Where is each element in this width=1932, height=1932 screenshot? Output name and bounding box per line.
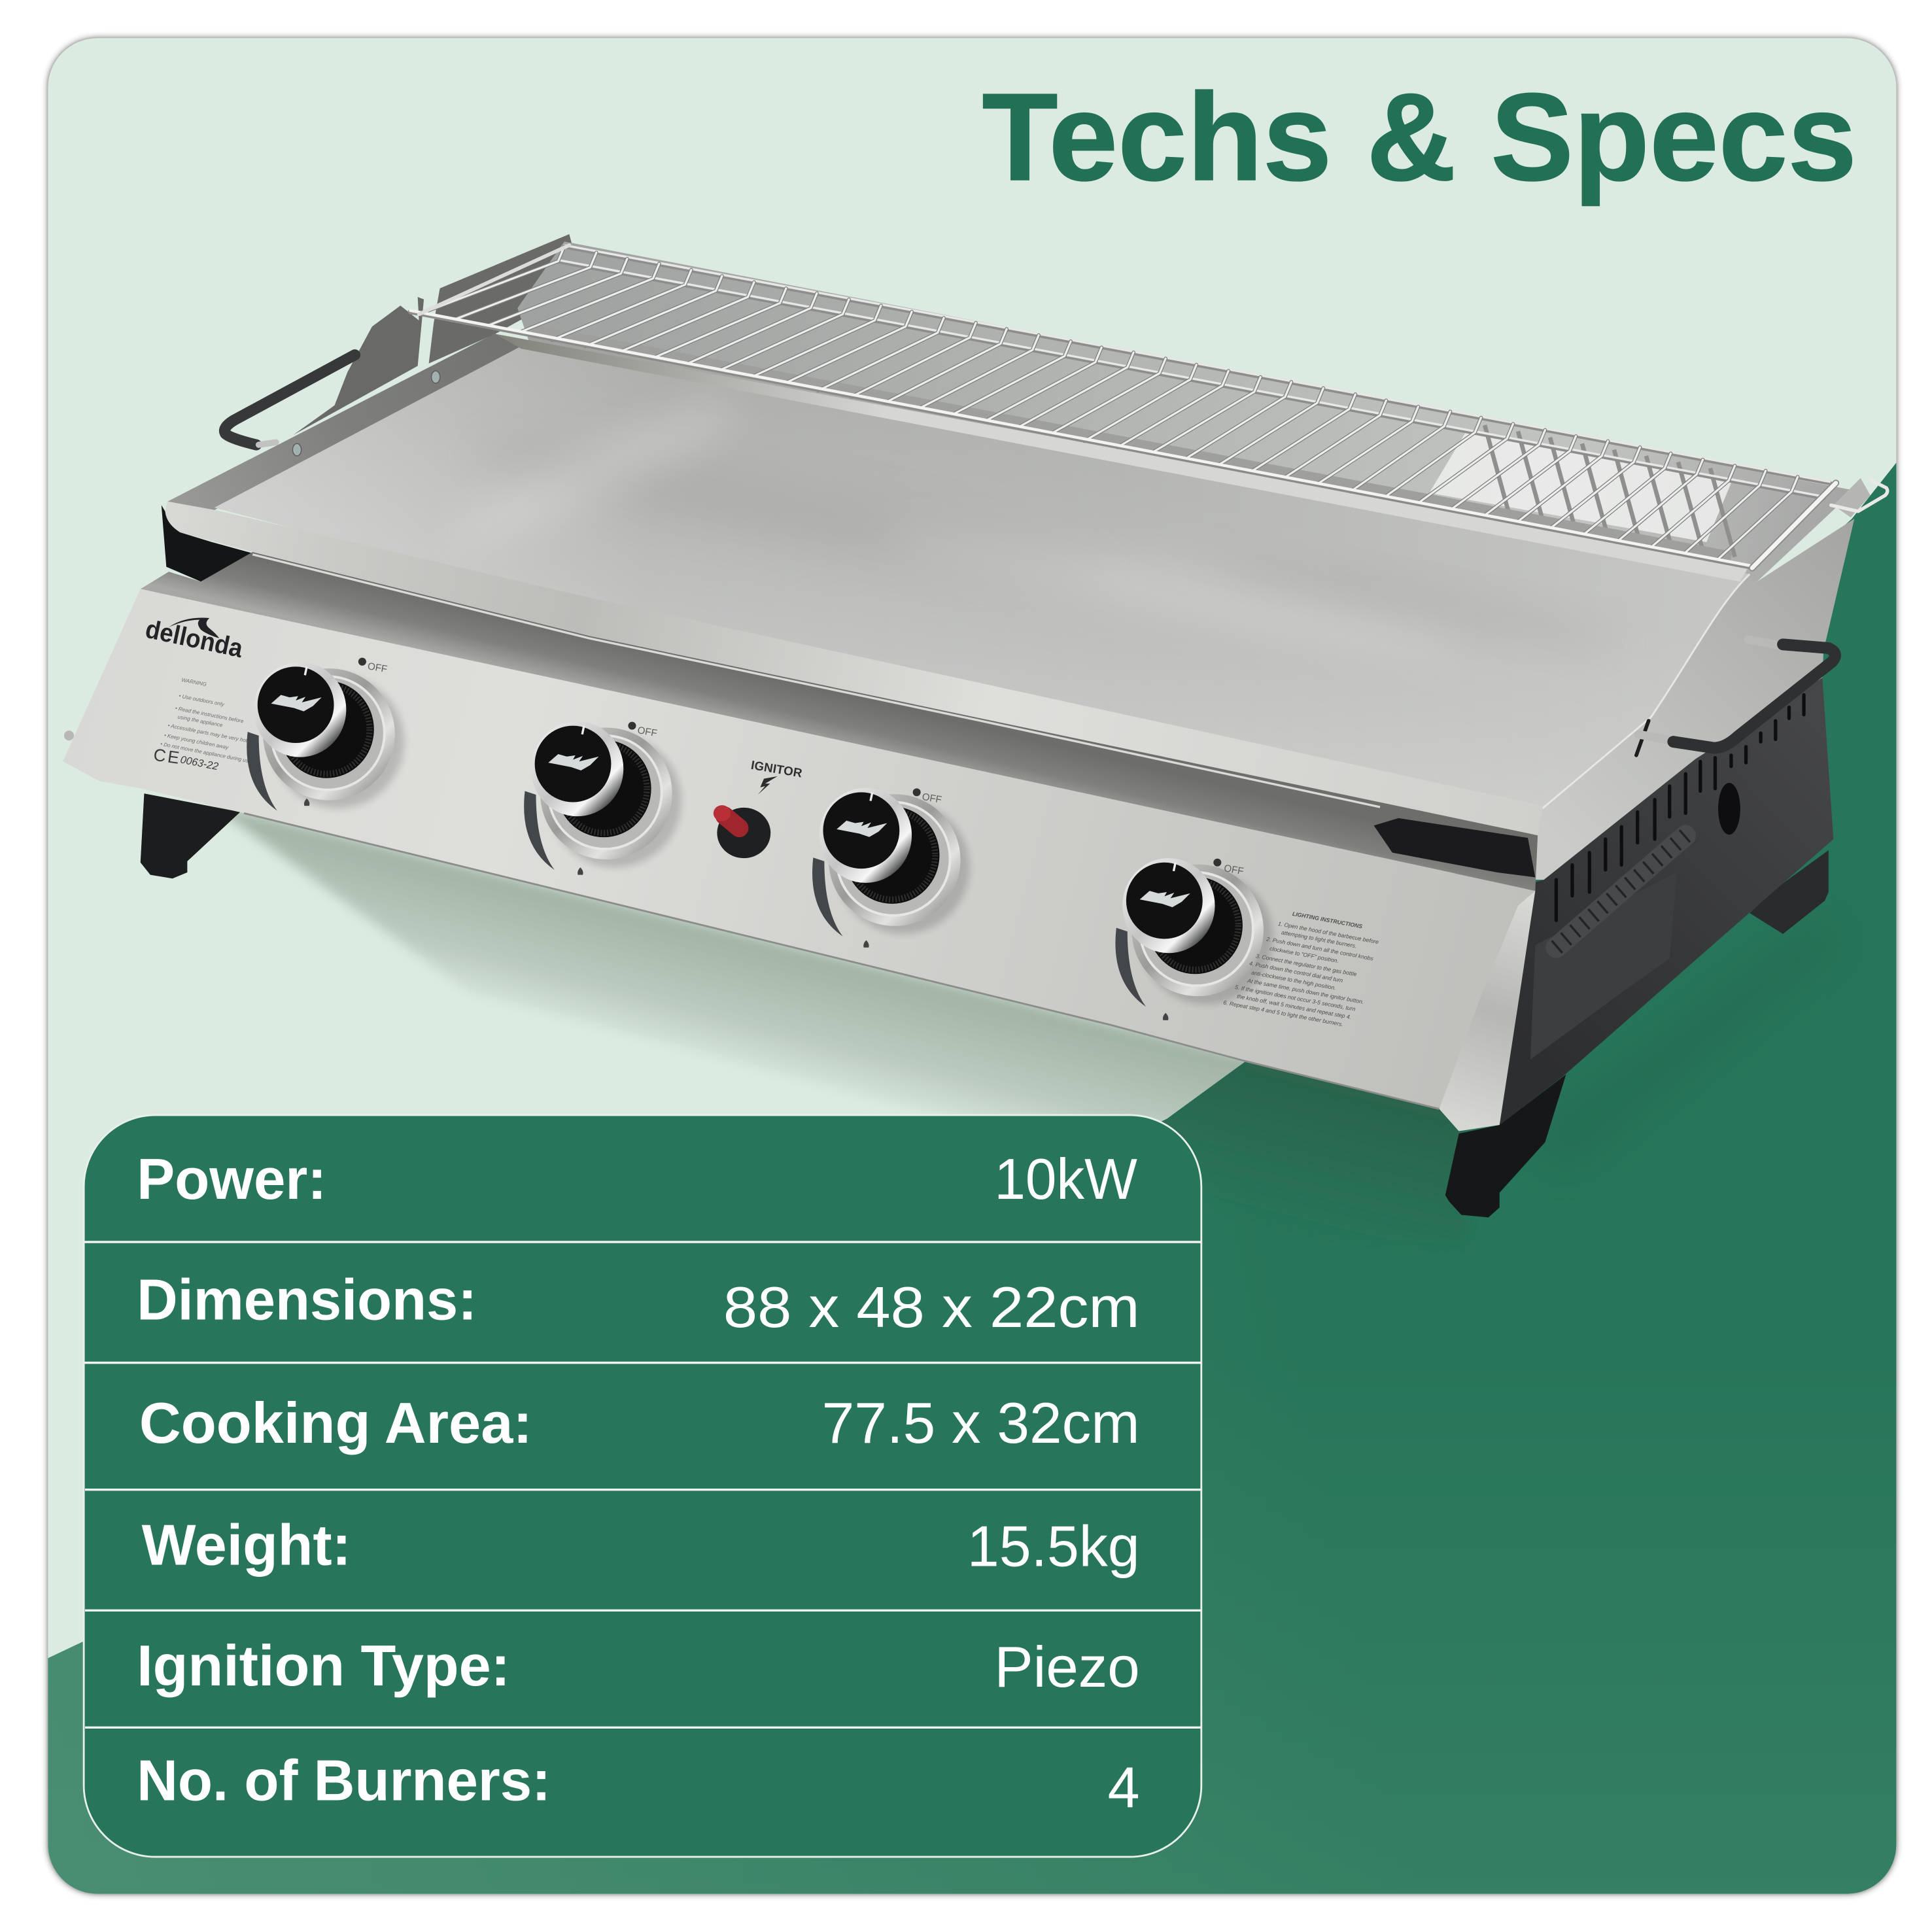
knob 4 bbox=[1115, 858, 1273, 1007]
left foot bbox=[141, 793, 240, 878]
right side flap bbox=[1439, 891, 1535, 1131]
row: burners: 4 bbox=[1108, 1755, 1140, 1820]
knob 1 bbox=[247, 663, 404, 811]
right end plate bbox=[1528, 519, 1854, 880]
ignitor button bbox=[714, 805, 770, 858]
row: cooking area bbox=[139, 1390, 1140, 1455]
row: cooking area: Cooking Area: bbox=[139, 1390, 532, 1455]
lighting instructions: attempting to light the burners. bbox=[1281, 929, 1357, 950]
griddle front lip bbox=[165, 502, 1543, 835]
griddle left rim bbox=[167, 334, 521, 510]
row: dimensions: Dimensions: bbox=[137, 1268, 477, 1332]
left screw bbox=[64, 731, 74, 740]
lighting instructions: 4. Push down the control dial and turn bbox=[1249, 960, 1343, 984]
griddle plate surface bbox=[215, 346, 1750, 811]
warning text: WARNING bbox=[181, 677, 207, 687]
back rim of griddle bbox=[495, 334, 1750, 581]
row: ignition type bbox=[137, 1633, 1140, 1699]
ignitor label: IGNITOR bbox=[750, 758, 804, 780]
warning text: • Do not move the appliance during use bbox=[160, 741, 252, 765]
floor shadow on green area bbox=[1146, 918, 1836, 1245]
vent slots bbox=[1556, 695, 1804, 920]
lip under-edge highlight bbox=[252, 555, 1380, 807]
ignitor bolt icon bbox=[758, 776, 778, 795]
off labels bbox=[358, 658, 1245, 877]
wire shadows bbox=[419, 247, 1798, 561]
row: weight bbox=[142, 1513, 1140, 1578]
panel top recess strip bbox=[141, 552, 1538, 891]
right handle bbox=[1636, 640, 1835, 755]
left grey bracket bbox=[293, 297, 424, 435]
row: weight: 15.5kg bbox=[967, 1513, 1140, 1578]
left handle bbox=[224, 355, 355, 445]
lighting instructions bbox=[1223, 901, 1382, 1031]
rear grey bracket bbox=[429, 234, 574, 364]
green diagonal background bbox=[37, 453, 1904, 1904]
reflected lattice bbox=[1485, 425, 1735, 557]
row: cooking area: 77.5 x 32cm bbox=[822, 1390, 1140, 1455]
knob 2 bbox=[524, 721, 681, 870]
CE mark: 0063-22 bbox=[179, 754, 219, 772]
floor shadow on light area bbox=[209, 803, 1269, 1128]
black body side bbox=[1500, 678, 1833, 1125]
small flame marks bbox=[304, 799, 1168, 1020]
row dividers bbox=[84, 1242, 1201, 1727]
rack end bar highlight bbox=[1752, 483, 1836, 568]
off labels: OFF bbox=[921, 791, 942, 806]
warning text bbox=[160, 677, 252, 765]
ribbed side handle bbox=[1556, 835, 1685, 948]
lower body panel bbox=[1530, 872, 1677, 1060]
row: weight: Weight: bbox=[142, 1513, 351, 1578]
griddle rear rod bbox=[410, 311, 1750, 566]
control panel front bbox=[63, 589, 1535, 1109]
warning text: • Keep young children away bbox=[164, 733, 230, 751]
rear black tray bbox=[1374, 818, 1535, 877]
griddle left bracket bbox=[162, 505, 252, 581]
lighting instructions: anti-clockwise to the high position. bbox=[1251, 969, 1337, 992]
row: power: Power: bbox=[137, 1147, 326, 1211]
row: burners: No. of Burners: bbox=[137, 1748, 551, 1812]
row: burners bbox=[137, 1748, 1140, 1820]
rear splash wall bbox=[517, 241, 1854, 581]
rear foot bbox=[1750, 850, 1829, 934]
left rim screws bbox=[292, 371, 440, 456]
row: ignition type: Ignition Type: bbox=[137, 1633, 510, 1698]
griddle rear rod shadow bbox=[410, 312, 1750, 567]
warning text: • Accessible parts may be very hot bbox=[167, 723, 249, 744]
CE mark: CE bbox=[152, 745, 182, 768]
wire rack bbox=[410, 245, 1888, 568]
warning text: • Read the instructions before bbox=[175, 705, 245, 724]
dellonda logo: dellonda bbox=[143, 615, 246, 663]
row: dimensions: 88 x 48 x 22cm bbox=[723, 1275, 1140, 1339]
off labels: OFF bbox=[367, 661, 388, 675]
wall reflection panes bbox=[1429, 431, 1731, 542]
griddle product illustration bbox=[63, 234, 1888, 1217]
gas inlet hole bbox=[1718, 783, 1740, 835]
rack rail highlights bbox=[558, 245, 1830, 496]
lighting instructions: 3. Connect the regulator to the gas bottle bbox=[1255, 952, 1357, 978]
lighting instructions: 5. If the ignition does not occur 3-5 seconds, turn bbox=[1234, 984, 1356, 1012]
knob 3 bbox=[812, 788, 970, 937]
row: power bbox=[137, 1147, 1137, 1211]
lighting instructions: LIGHTING INSTRUCTIONS bbox=[1292, 910, 1363, 930]
lighting instructions: clockwise to "OFF" position. bbox=[1269, 945, 1339, 964]
CE mark bbox=[152, 745, 219, 772]
title: Techs & Specs bbox=[982, 68, 1857, 207]
rack end bar bbox=[1752, 483, 1836, 568]
rack rear left corner bbox=[419, 245, 569, 314]
lighting instructions: At the same time, push down the ignitor button. bbox=[1246, 977, 1364, 1005]
logo swoosh bbox=[169, 618, 219, 638]
lighting instructions: 2. Push down and turn all the control knobs bbox=[1266, 935, 1374, 962]
spec table panel bbox=[84, 1115, 1201, 1857]
wire loop clip bbox=[1831, 481, 1888, 511]
lighting instructions: 1. Open the hood of the barbecue before bbox=[1277, 920, 1379, 945]
row: ignition type: Piezo bbox=[994, 1634, 1140, 1699]
clip plate bbox=[1833, 478, 1871, 517]
panel lower edge bbox=[244, 813, 1439, 1109]
lighting instructions: 6. Repeat step 4 and 5 to light the other burners. bbox=[1223, 999, 1344, 1027]
off labels: OFF bbox=[636, 725, 658, 739]
wall lower shadow band bbox=[532, 330, 1731, 557]
table background bbox=[84, 1115, 1201, 1857]
row: dimensions bbox=[137, 1268, 1140, 1339]
warning text: • Use outdoors only bbox=[179, 693, 225, 708]
lighting instructions: the knob off, wait 5 minutes and repeat step 4. bbox=[1237, 993, 1352, 1020]
off labels: OFF bbox=[1223, 863, 1245, 877]
large front foot bbox=[1445, 1075, 1566, 1217]
rack rails bbox=[558, 247, 1830, 498]
row: power: 10kW bbox=[994, 1147, 1137, 1211]
warning text: using the appliance bbox=[177, 714, 224, 729]
wire highlights bbox=[419, 247, 1798, 561]
